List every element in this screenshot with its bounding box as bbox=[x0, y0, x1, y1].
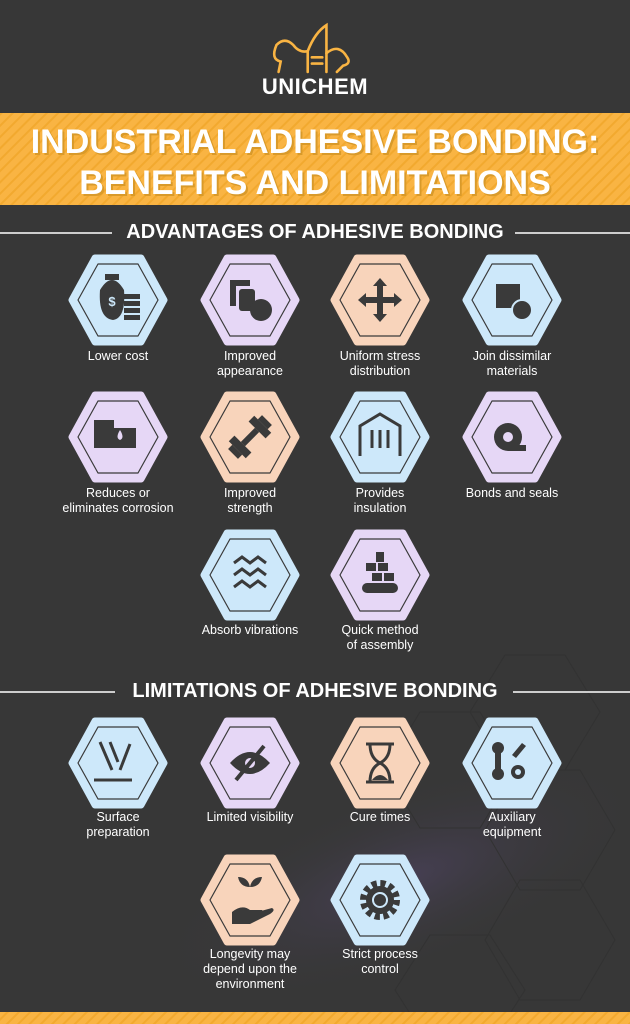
text: Surface bbox=[96, 810, 140, 824]
text: Reduces or bbox=[86, 486, 150, 500]
heading: limitations: LIMITATIONS OF ADHESIVE BONDING bbox=[132, 680, 498, 702]
icon: lower cost: $ bbox=[108, 294, 116, 309]
section divider lines bbox=[0, 233, 630, 692]
text: Provides bbox=[356, 486, 404, 500]
text: equipment bbox=[483, 825, 541, 839]
background decoration bbox=[125, 655, 630, 1024]
icon: surface preparation bbox=[72, 721, 164, 805]
text: Limited visibility bbox=[207, 810, 293, 824]
text: Cure times bbox=[350, 810, 410, 824]
text: distribution bbox=[350, 364, 410, 378]
title: BENEFITS AND LIMITATIONS bbox=[79, 164, 551, 202]
icon: insulation bbox=[334, 395, 426, 479]
icon: join dissimilar bbox=[466, 258, 558, 342]
text: Improved bbox=[224, 349, 276, 363]
labels: Lower cost bbox=[88, 349, 148, 363]
icon: absorb vibrations bbox=[204, 533, 296, 617]
text: eliminates corrosion bbox=[62, 501, 174, 515]
text: strength bbox=[227, 501, 273, 515]
logo bbox=[262, 22, 368, 99]
text: appearance bbox=[217, 364, 283, 378]
text: preparation bbox=[86, 825, 150, 839]
text: Absorb vibrations bbox=[202, 623, 298, 637]
bottom strip bbox=[0, 1012, 630, 1024]
icon: lower cost bbox=[72, 258, 164, 342]
icon: longevity bbox=[204, 858, 296, 942]
text: Strict process bbox=[342, 947, 418, 961]
title: INDUSTRIAL ADHESIVE BONDING: bbox=[31, 123, 599, 161]
text: materials bbox=[487, 364, 537, 378]
icon: quick assembly bbox=[334, 533, 426, 617]
text: Bonds and seals bbox=[466, 486, 558, 500]
icon: limited visibility bbox=[204, 721, 296, 805]
text: Auxiliary bbox=[488, 810, 536, 824]
logo: UNICHEM bbox=[262, 74, 368, 99]
icon: strength bbox=[204, 395, 296, 479]
text: Uniform stress bbox=[340, 349, 420, 363]
icon: auxiliary equipment bbox=[466, 721, 558, 805]
icon: improved appearance bbox=[204, 258, 296, 342]
text: Join dissimilar bbox=[473, 349, 551, 363]
text: environment bbox=[216, 977, 284, 991]
text: Improved bbox=[224, 486, 276, 500]
text: depend upon the bbox=[203, 962, 297, 976]
icon: bonds and seals bbox=[466, 395, 558, 479]
icon: strict process control bbox=[334, 858, 426, 942]
text: of assembly bbox=[347, 638, 413, 652]
icon: corrosion bbox=[72, 395, 164, 479]
title bbox=[31, 123, 599, 202]
text: Longevity may bbox=[210, 947, 290, 961]
icon: cure times bbox=[334, 721, 426, 805]
text: control bbox=[361, 962, 399, 976]
text: Quick method bbox=[341, 623, 419, 637]
heading: advantages: ADVANTAGES OF ADHESIVE BONDING bbox=[126, 221, 504, 243]
icon: uniform stress bbox=[334, 258, 426, 342]
title banner bbox=[0, 113, 630, 205]
text: insulation bbox=[354, 501, 406, 515]
